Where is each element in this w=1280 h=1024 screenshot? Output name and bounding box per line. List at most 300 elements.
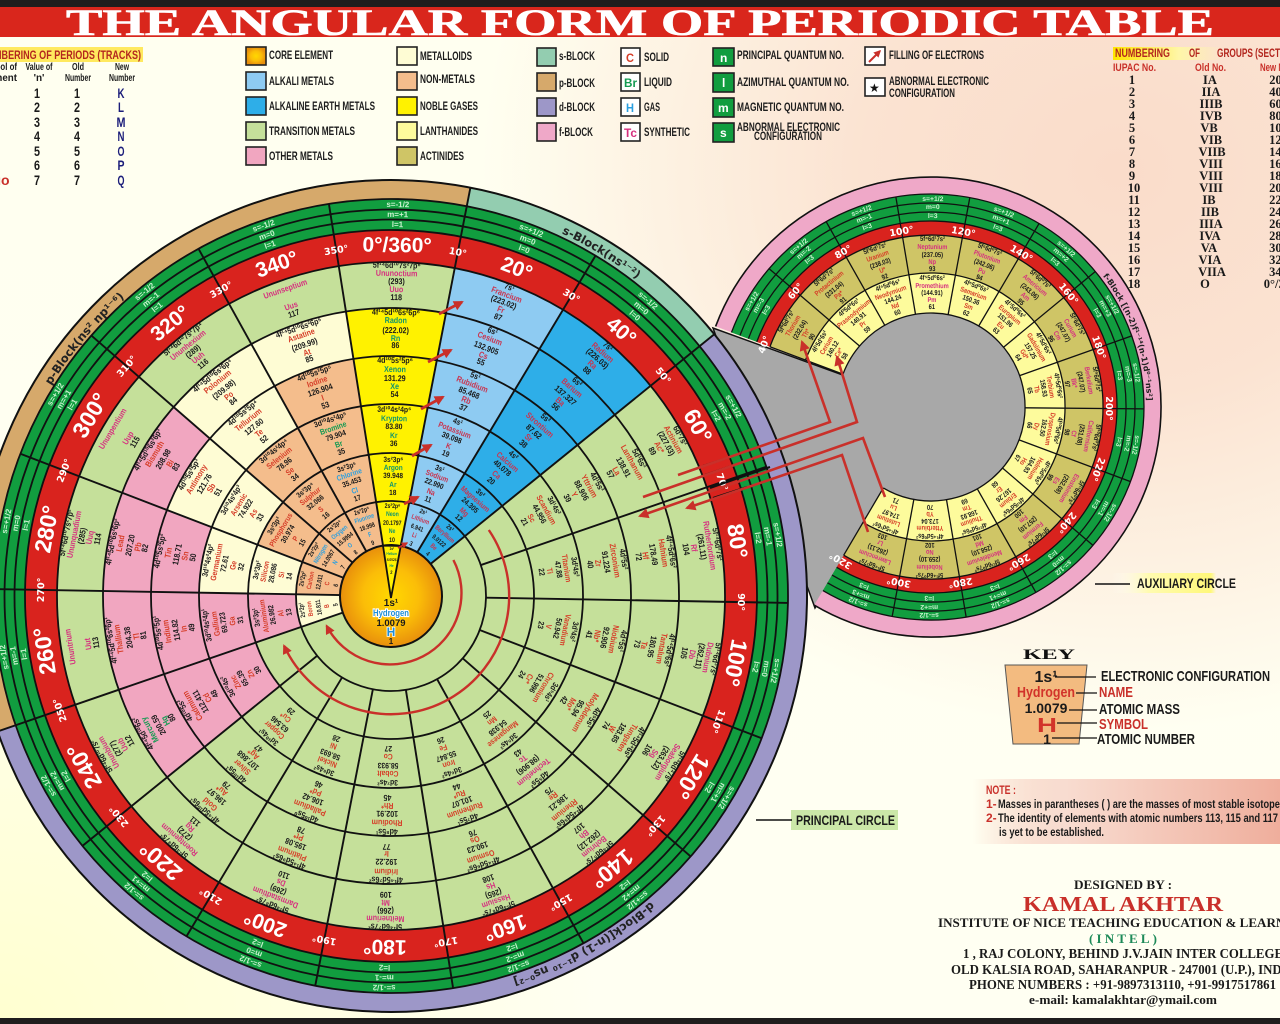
sector 340: group 17: 4d¹⁰5s²5p⁵ bbox=[296, 363, 333, 384]
sector 120: group 6: Cr* bbox=[522, 672, 536, 686]
legend: physical state: Br bbox=[624, 76, 637, 90]
quantum number labels bbox=[0, 193, 790, 999]
sector 200: group 10: Nickel bbox=[316, 754, 338, 770]
groups table rows: 9 bbox=[1129, 169, 1135, 183]
sector 20: alkali metals: 37 bbox=[458, 402, 469, 414]
sector 220: group 11: 79 bbox=[220, 779, 233, 791]
sector 180: group 9: Ir bbox=[384, 849, 389, 859]
actinide elements: Md bbox=[974, 538, 984, 548]
sector 240: group 12: Uub bbox=[115, 736, 130, 753]
sector 20: alkali metals: Na bbox=[425, 488, 436, 498]
quantum number labels: s=-1/2 bbox=[122, 880, 146, 902]
core element circle bbox=[339, 544, 443, 648]
degree labels: minor: 90° bbox=[735, 593, 746, 611]
quantum number labels: l=1 bbox=[392, 220, 404, 229]
actinide elements: (259.10) bbox=[919, 555, 940, 563]
legend: element categories column 1: TRANSITION METALS bbox=[269, 124, 355, 138]
legend: element categories column 2: METALLOIDS bbox=[420, 49, 472, 63]
degree labels: major: 40° bbox=[601, 312, 640, 351]
sector 260: group 13: Uut bbox=[82, 637, 94, 651]
sector 320: group 16: Po bbox=[222, 389, 236, 402]
lanthanide elements: Terbium bbox=[1044, 376, 1056, 399]
actinide elements: Thorium bbox=[784, 314, 803, 338]
lanthanide elements: Neodymium bbox=[874, 284, 908, 302]
sector 140: group 7 bbox=[467, 699, 618, 868]
quantum number labels: l=2 bbox=[702, 780, 716, 795]
degree labels: major: 100° bbox=[718, 637, 753, 689]
aux quantum number labels: m=0 bbox=[1050, 554, 1065, 568]
sector 340: group 17: Cl bbox=[351, 487, 359, 496]
actinide elements: 5f³6d¹7s² bbox=[863, 241, 888, 257]
sector 20: alkali metals: 19 bbox=[440, 448, 451, 459]
sector 20: alkali metals: 85.468 bbox=[457, 384, 481, 401]
key trapezoid sample: 1 bbox=[1043, 731, 1051, 747]
sector 260: group 13: 204.38 bbox=[122, 625, 135, 649]
block labels: p-Block(ns² np¹⁻⁶) bbox=[46, 292, 124, 386]
groups table heading: OF bbox=[1189, 46, 1200, 60]
lanthanide elements: 4f⁹5d⁰6s² bbox=[1052, 373, 1064, 399]
panel: key bbox=[1005, 647, 1270, 748]
table rows: 4 bbox=[74, 128, 80, 144]
sector 300: group 15: Nitrogen bbox=[313, 543, 330, 565]
sector 80: group 4: 3d²4s² bbox=[569, 556, 582, 578]
groups table rows: 10 bbox=[1128, 181, 1140, 195]
sector 0: noble gases: 3s²3p⁶ bbox=[383, 456, 403, 464]
lanthanide elements: Yb bbox=[926, 510, 934, 517]
degree labels: minor: 250° bbox=[51, 696, 70, 723]
lanthanide elements: Ho bbox=[1018, 456, 1028, 466]
sector 220: group 11: Gold bbox=[201, 795, 219, 813]
actinide elements: Mendelevium bbox=[966, 548, 1003, 567]
quantum number labels: s=-1/2 bbox=[636, 290, 660, 312]
lanthanide elements: Tm bbox=[961, 502, 972, 513]
sector 140: group 7: Bohrium bbox=[580, 834, 609, 860]
table rows: 2 bbox=[74, 99, 80, 115]
quantum number labels: m=-1 bbox=[374, 973, 394, 982]
lanthanide elements: 140.12 bbox=[825, 339, 841, 359]
degree labels: minor: 10° bbox=[448, 246, 468, 260]
table rows: 2 bbox=[34, 99, 40, 115]
sector 320: group 16: 4d¹⁰5s²5p⁴ bbox=[226, 398, 260, 428]
sector 40: alkaline earth metals: 38 bbox=[517, 438, 530, 450]
aux quantum number labels: m=-2 bbox=[796, 245, 813, 261]
column headers: Old bbox=[72, 62, 84, 73]
sector 120: group 6: 5f¹⁴6d⁴7s² bbox=[661, 749, 687, 784]
sector 0: noble gases: Xe bbox=[390, 381, 400, 391]
hydrogen element in core: H bbox=[387, 625, 395, 639]
sector 260: group 13: Al bbox=[278, 609, 286, 617]
sector 0: noble gases: Neon bbox=[386, 511, 399, 518]
sector 0: noble gases bbox=[368, 260, 421, 545]
actinide elements: 98 bbox=[1062, 428, 1071, 436]
panel: designer credits: DESIGNED BY : bbox=[1074, 877, 1172, 892]
sector 340: group 17: Uus bbox=[283, 299, 300, 313]
sector 120: group 6: 24 bbox=[515, 669, 528, 681]
helium wedge bbox=[382, 546, 401, 598]
sector 80: group 4: Titanium bbox=[560, 554, 574, 583]
actinide elements: U* bbox=[878, 266, 887, 275]
sector 20: alkali metals: 3 bbox=[408, 541, 414, 548]
aux quantum number labels: m=+3 bbox=[851, 587, 871, 600]
sector 0: noble gases: Xenon bbox=[384, 364, 406, 374]
sector 20: alkali metals: 4s¹ bbox=[452, 415, 465, 428]
hydrogen element in core: Hydrogen bbox=[373, 608, 409, 619]
sector 320: group 16: 2s²2p⁴ bbox=[326, 518, 343, 534]
sector 320: group 16: 8 bbox=[353, 549, 360, 557]
sector 140: group 7: Mn bbox=[485, 714, 499, 728]
grey connecting wedge bbox=[713, 328, 931, 608]
degree labels: major: 140° bbox=[585, 844, 639, 894]
arrows: connecting principal and auxiliary circles bbox=[640, 342, 885, 532]
legend: quantum numbers: l bbox=[722, 76, 725, 90]
sectors: metalloids bbox=[207, 333, 350, 620]
sector 220: group 11: 47 bbox=[253, 742, 265, 754]
sector 140: group 7: 43 bbox=[511, 746, 524, 759]
lanthanide elements: Ytterbium bbox=[916, 524, 943, 532]
sector 40: alkaline earth metals: Ca bbox=[490, 468, 503, 482]
sector 280: group 14: 118.71 bbox=[171, 542, 184, 566]
sector 260: group 13: 26.982 bbox=[268, 604, 278, 625]
table rows bbox=[0, 85, 126, 188]
quantum number labels: m=+2 bbox=[620, 882, 642, 903]
sector 300: group 15: N bbox=[332, 560, 340, 566]
lanthanide elements: Gadolinium bbox=[1025, 332, 1047, 363]
sector 340: group 17: Astatine bbox=[286, 326, 317, 344]
sector 340: group 17: Chlorine bbox=[336, 467, 363, 483]
sector 40: alkaline earth metals: (226.03) bbox=[584, 346, 611, 371]
lanthanide elements: 151.96 bbox=[996, 312, 1014, 329]
quantum number labels: s=+1/2 bbox=[624, 889, 650, 912]
sector 280: group 14: 5f¹⁴6d¹⁰7s²7p² bbox=[57, 509, 76, 557]
sector 300: group 15: 3s²3p³ bbox=[267, 516, 283, 536]
sector 280: group 14: 6 bbox=[333, 583, 341, 588]
quantum number labels: s=-1/2 bbox=[251, 218, 276, 234]
sector 180: group 9: Meitnerium bbox=[366, 913, 404, 924]
sector 40: alkaline earth metals: Ra bbox=[586, 358, 599, 372]
sector 160: group 8: (265) bbox=[484, 886, 503, 901]
sectors: alkali metals bbox=[427, 407, 491, 431]
sector 80: group 4: 5f¹⁴6d²7s² bbox=[710, 527, 725, 562]
quantum number labels: l=2 bbox=[250, 936, 265, 949]
panel: note: NOTE : bbox=[986, 783, 1016, 797]
lanthanide elements: 168.93 bbox=[959, 508, 978, 521]
lanthanide elements: Dy bbox=[1031, 422, 1040, 431]
groups table rows: 14 bbox=[1128, 229, 1141, 243]
sector 160: group 8: Ruthenium bbox=[446, 800, 484, 821]
degree labels: major: 160° bbox=[481, 909, 529, 945]
sector 200: group 10: Darmstadtium bbox=[251, 884, 299, 910]
sector 280: group 14: 28.086 bbox=[268, 563, 279, 584]
sector 100: group 5: 4f¹⁴5d³6s² bbox=[661, 633, 677, 668]
legend: quantum numbers: MAGNETIC QUANTUM NO. bbox=[737, 100, 844, 114]
sector 200: group 10: Pt* bbox=[291, 830, 305, 843]
sector 260: group 13: In bbox=[179, 625, 189, 633]
sector 280: group 14: 207.20 bbox=[123, 533, 137, 557]
sector 120: group 6: Sg bbox=[647, 748, 660, 761]
legend: element categories column 2: NON-METALS bbox=[420, 72, 475, 86]
legend: blocks: s-BLOCK bbox=[559, 49, 595, 63]
table rows: 6 bbox=[34, 157, 40, 173]
sector 280: group 14: Silicon bbox=[260, 561, 271, 583]
aux quantum number labels: s=-1/2 bbox=[1130, 435, 1140, 455]
sector 220: group 11: 4d¹⁰5s¹ bbox=[224, 762, 249, 785]
sector 340: group 17: 2s²2p⁵ bbox=[353, 505, 371, 517]
table rows: 6 bbox=[74, 157, 80, 173]
aux quantum number labels: s=-1/2 bbox=[919, 611, 939, 618]
aux quantum number labels: l=3 bbox=[761, 304, 772, 316]
sector 240: group 12: Cd bbox=[201, 691, 214, 704]
sector 100: group 5: 92.906 bbox=[598, 626, 612, 650]
actinide elements: 100 bbox=[1012, 507, 1025, 519]
actinide elements: (231.04) bbox=[824, 280, 845, 300]
lanthanide elements: 150.36 bbox=[961, 294, 981, 307]
actinide elements: (258.10) bbox=[970, 543, 993, 557]
table rows: 7 bbox=[74, 172, 80, 188]
lanthanide elements: 66 bbox=[1025, 421, 1033, 429]
actinide elements: 5f⁶6d⁰7s² bbox=[977, 242, 1003, 258]
sector 60: group 3: Actinium bbox=[662, 424, 685, 455]
sector 20: alkali metals: Francium bbox=[490, 284, 523, 305]
lanthanide elements: Lu bbox=[889, 502, 898, 512]
sector 240: group 12: 3d¹⁰4s² bbox=[218, 674, 238, 699]
sector 320: group 16: S bbox=[317, 506, 326, 514]
aux quantum number labels: s=+1/2 bbox=[993, 206, 1015, 220]
sector 260: group 13: 3s²3p¹ bbox=[252, 607, 262, 627]
sector 200: group 10: 4f¹⁴5d⁹6s¹ bbox=[271, 850, 307, 872]
quantum number labels: l=2 bbox=[59, 768, 73, 783]
groups table rows: IIIA bbox=[1199, 217, 1223, 231]
sector 340: group 17: 17 bbox=[353, 494, 362, 504]
sector 0: noble gases: 3d¹⁰4s²4p⁶ bbox=[377, 404, 411, 414]
sector 220: group 11 bbox=[153, 697, 303, 866]
aux quantum number labels: l=3 bbox=[928, 213, 938, 220]
sector 180: group 9: 4f¹⁴5d⁷6s² bbox=[369, 875, 403, 885]
legend: arrow and star symbols: ABNORMAL ELECTRONIC bbox=[889, 74, 989, 88]
actinide elements: Curium bbox=[1062, 318, 1078, 339]
sector 0: noble gases: (293) bbox=[388, 276, 405, 286]
sector 300: group 15: Bi bbox=[164, 458, 176, 469]
sector 160: group 8 bbox=[426, 732, 519, 920]
sector 220: group 11: Copper bbox=[262, 719, 287, 742]
legend: physical state: Tc bbox=[624, 126, 637, 140]
sector 220: group 11: Rg bbox=[183, 821, 197, 834]
sector 160: group 8: 190.23 bbox=[465, 839, 489, 856]
sector 140: group 7: 54.938 bbox=[487, 718, 509, 738]
groups table rows: 13 bbox=[1128, 217, 1140, 231]
top dark band bbox=[0, 0, 1280, 7]
actinide elements: 5f¹³6d⁰7s² bbox=[973, 557, 1001, 573]
sector 60: group 3: Sc bbox=[525, 512, 538, 524]
sector 340: group 17 bbox=[258, 276, 389, 551]
sector 40: alkaline earth metals: Beryllium bbox=[433, 525, 455, 545]
sector 0: noble gases: 36 bbox=[390, 438, 398, 448]
quantum number labels: l=0 bbox=[517, 243, 532, 256]
actinide elements: Cf bbox=[1069, 430, 1078, 438]
lanthanide elements: 167.26 bbox=[994, 486, 1012, 503]
sector 20: alkali metals: Rubidium bbox=[455, 374, 489, 395]
sector 340: group 17: F bbox=[368, 532, 373, 539]
sector 180: group 9: Cobalt bbox=[377, 769, 399, 779]
degree labels: major: 80° bbox=[722, 522, 753, 560]
actinide elements: 5f¹¹6d⁰7s² bbox=[1065, 479, 1085, 505]
lanthanide elements: Promethium bbox=[915, 282, 949, 290]
sector 80: group 4: 91.224 bbox=[600, 550, 613, 574]
bottom dark band bbox=[0, 1018, 1280, 1024]
sector 80: group 4: Zr bbox=[593, 559, 603, 567]
lanthanide elements: 64 bbox=[1013, 353, 1023, 363]
sector 320: group 16: Selenium bbox=[264, 444, 294, 471]
actinide elements: 5f¹²6d⁰7s² bbox=[1025, 525, 1050, 548]
sector 240: group 12: (277) bbox=[107, 739, 124, 758]
aux degree labels: 240° bbox=[1054, 509, 1078, 535]
sectors: noble gases bbox=[365, 426, 423, 430]
sector 200: group 10: 78 bbox=[295, 824, 307, 836]
degree labels: minor: 350° bbox=[323, 243, 349, 258]
sector 40: alkaline earth metals: Barium bbox=[559, 376, 584, 400]
aux quantum number labels: s=-1/2 bbox=[1131, 363, 1141, 383]
aux quantum number labels: l=3 bbox=[804, 254, 816, 266]
sector 0: noble gases: 4f¹⁴5d¹⁰6s²6p⁶ bbox=[372, 307, 420, 318]
sector 300: group 15: 4d¹⁰5s²5p³ bbox=[176, 457, 202, 492]
sector 20: alkali metals: Cs bbox=[477, 349, 490, 362]
hydrogen element in core: 1 bbox=[389, 637, 394, 646]
sector 20: alkali metals: Lithium bbox=[410, 514, 430, 527]
actinide elements: No bbox=[926, 548, 934, 555]
sector 300: group 15: 7 bbox=[340, 564, 348, 571]
lanthanide elements: Pm bbox=[927, 296, 937, 304]
lanthanide elements: Europium bbox=[997, 304, 1022, 327]
sector 300: group 15: Bismuth bbox=[143, 439, 166, 469]
sector 200: group 10: 3d⁸4s² bbox=[312, 762, 336, 779]
aux quantum number labels: m=-1 bbox=[1096, 500, 1110, 517]
sector 140: group 7: (262.12) bbox=[575, 828, 602, 853]
degree labels: major: 220° bbox=[134, 835, 187, 886]
sector 20: alkali metals: 132.905 bbox=[472, 339, 501, 357]
lanthanide elements: 158.93 bbox=[1038, 379, 1048, 398]
sector 60: group 3: 5d¹6s² bbox=[630, 447, 649, 470]
lanthanide elements: 174.97 bbox=[881, 507, 901, 520]
sector 0: noble gases: 18 bbox=[389, 490, 397, 497]
sector 340: group 17: Br bbox=[334, 438, 344, 450]
sector 240: group 12: 4f¹⁴5d¹⁰6s² bbox=[130, 715, 156, 752]
sector 60: group 3: Scandium bbox=[534, 493, 559, 527]
sector 300: group 15: 83 bbox=[170, 460, 183, 473]
sector 120: group 6: Mo* bbox=[563, 696, 578, 713]
sector 40: alkaline earth metals: 6s² bbox=[570, 375, 584, 389]
sector 100: group 5: V bbox=[544, 624, 554, 630]
lanthanide elements: 4f¹5d¹6s² bbox=[811, 329, 830, 354]
sector 0: noble gases: 54 bbox=[390, 389, 399, 399]
sector 340: group 17: 4f¹⁴5d¹⁰6s²6p⁵ bbox=[274, 315, 323, 340]
block ring: p, s, d segments bbox=[0, 182, 805, 1010]
sector 320: group 16: 127.60 bbox=[242, 416, 266, 437]
lanthanide elements: Eu bbox=[995, 321, 1006, 331]
sector 120: group 6: 51.996 bbox=[527, 672, 546, 695]
actinide elements: Am bbox=[1019, 291, 1031, 303]
sector 260: group 13: 49 bbox=[186, 622, 197, 632]
sector 340: group 17: I bbox=[320, 393, 325, 403]
lanthanide elements bbox=[809, 273, 1065, 541]
sector 220: group 11: (272) bbox=[175, 824, 194, 843]
sector 40: alkaline earth metals: 56 bbox=[549, 401, 562, 413]
sector 200: group 10: Palladium bbox=[292, 797, 327, 818]
sector 320: group 16: Polonium bbox=[202, 368, 233, 396]
actinide elements: 5f⁴6d¹7s² bbox=[920, 235, 945, 243]
sector 60: group 3: 138.91 bbox=[614, 455, 633, 480]
sector 140: group 7: 75 bbox=[542, 785, 555, 797]
aux quantum number labels: m=+1 bbox=[991, 214, 1011, 227]
sector 120: group 6: 106 bbox=[639, 742, 654, 758]
panel: designer credits: KAMAL AKHTAR bbox=[1023, 892, 1224, 916]
groups table rows: 16 bbox=[1128, 253, 1140, 267]
legend: blocks: f-BLOCK bbox=[559, 125, 593, 139]
sector 40: alkaline earth metals: Ba bbox=[553, 395, 567, 409]
lanthanide elements: Holmium bbox=[1025, 456, 1044, 481]
groups table heading: IUPAC No. bbox=[1113, 62, 1156, 74]
sector 320: group 16: Tellurium bbox=[233, 406, 264, 434]
sector 340: group 17: 9 bbox=[371, 540, 376, 548]
key trapezoid sample: 1.0079 bbox=[1025, 700, 1068, 716]
groups table rows bbox=[1128, 73, 1280, 291]
actinide elements: 92 bbox=[881, 272, 890, 282]
sector 0: noble gases: 10 bbox=[389, 537, 395, 544]
lanthanide elements: 4f¹⁴5d⁰6s² bbox=[916, 532, 944, 540]
legend: quantum numbers: s bbox=[720, 126, 727, 140]
radial sector lines bbox=[0, 179, 795, 994]
sector 20: alkali metals: Cesium bbox=[476, 329, 504, 348]
sector 340: group 17: Iodine bbox=[306, 373, 329, 390]
quantum number labels: s=+1/2 bbox=[45, 381, 66, 407]
sector 60: group 3: (227.03) bbox=[656, 429, 677, 458]
sector 120: group 6: 42 bbox=[557, 694, 570, 706]
lanthanide elements: 144.24 bbox=[884, 293, 903, 306]
sector 0: noble gases: 2s²2p⁶ bbox=[385, 502, 401, 510]
groups table rows: IIB bbox=[1201, 205, 1219, 219]
sector 180: group 9: 3d⁷4s² bbox=[377, 778, 398, 788]
sector 320: group 16: 3s²3p⁴ bbox=[295, 481, 316, 500]
title: THE ANGULAR FORM OF PERIODIC TABLE bbox=[66, 3, 1214, 44]
aux degree labels: 60° bbox=[786, 281, 806, 302]
sector 180: group 9: 77 bbox=[383, 842, 391, 852]
table rows: 1 bbox=[34, 85, 40, 101]
sector 40: alkaline earth metals: 87.62 bbox=[524, 422, 544, 442]
sector 320: group 16: 116 bbox=[196, 356, 211, 371]
aux quantum number labels: m=+2 bbox=[1052, 247, 1070, 264]
quantum number labels: m=+1 bbox=[55, 388, 74, 411]
sector 260: group 13: 2s²2p¹ bbox=[297, 602, 307, 618]
panel: designer credits: e-mail: kamalakhtar@ymail.com bbox=[1029, 992, 1217, 1007]
legend: physical state: C bbox=[626, 51, 634, 65]
sector 260: group 13: 31 bbox=[235, 615, 246, 624]
sector 260: group 13: 69.723 bbox=[217, 612, 230, 634]
panel: designer credits bbox=[938, 877, 1280, 1007]
aux quantum number labels: l=3 bbox=[858, 580, 870, 590]
sector 40: alkaline earth metals: 2s² bbox=[444, 523, 455, 534]
actinide elements: (247.07) bbox=[1054, 321, 1072, 344]
lanthanide elements: 4f⁵5d⁰6s² bbox=[919, 274, 945, 282]
sector 180: group 9: Mt bbox=[381, 898, 390, 908]
sector 260: group 13: Boron bbox=[306, 600, 315, 617]
sector 220: group 11: 29 bbox=[285, 705, 297, 717]
degree labels: major: 60° bbox=[678, 404, 718, 447]
actinide elements: 5f²6d¹7s² bbox=[813, 267, 836, 288]
sector 40: alkaline earth metals bbox=[416, 331, 622, 568]
aux ring outlines bbox=[713, 175, 1163, 639]
sector 0: noble gases: Argon bbox=[384, 464, 403, 472]
aux quantum number labels: l=3 bbox=[1114, 436, 1123, 447]
helium wedge: Helium bbox=[386, 552, 397, 556]
sector 300: group 15: Arsenic bbox=[228, 491, 249, 518]
